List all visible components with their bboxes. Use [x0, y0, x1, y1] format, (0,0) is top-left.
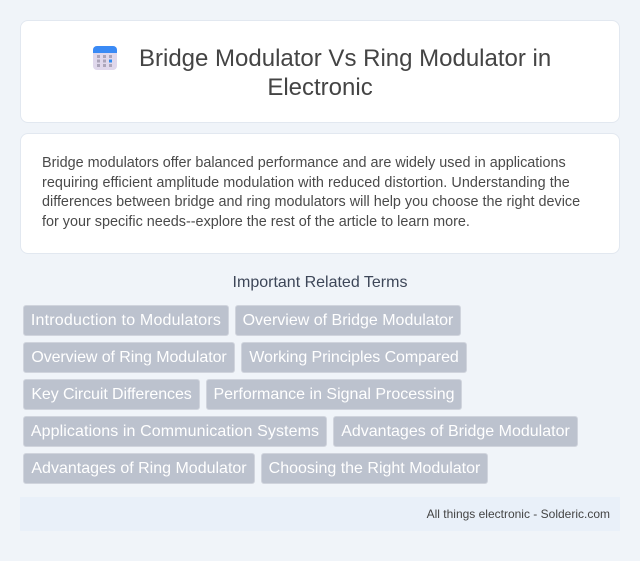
tag — [206, 379, 462, 410]
tag: Overview of Bridge Modulator — [243, 312, 453, 329]
footer bar — [20, 497, 620, 531]
tag: Introduction to Modulators — [31, 312, 221, 329]
description text — [42, 155, 580, 230]
icon: calendar — [93, 46, 117, 70]
tag — [241, 342, 467, 373]
description text: for your specific needs--explore the rest of the article to learn more. — [42, 214, 470, 230]
description panel — [20, 133, 620, 254]
description text: Bridge modulators offer balanced performance and are widely used in applications — [42, 155, 566, 171]
tag: Applications in Communication Systems — [31, 423, 319, 440]
tag — [23, 416, 327, 447]
tag — [23, 453, 255, 484]
tag: Advantages of Bridge Modulator — [341, 423, 570, 440]
description text: differences between bridge and ring modulators will help you choose the right device — [42, 194, 580, 210]
tag: Overview of Ring Modulator — [31, 349, 227, 366]
header panel — [20, 20, 620, 123]
title line 2: Electronic — [267, 74, 373, 101]
footer text: All things electronic - Solderic.com — [427, 507, 610, 521]
description text: requiring efficient amplitude modulation with reduced distortion. Understanding the — [42, 175, 570, 191]
tag — [23, 342, 235, 373]
tag: Working Principles Compared — [249, 349, 459, 366]
tag — [333, 416, 578, 447]
tag: Choosing the Right Modulator — [269, 460, 480, 477]
tag — [23, 305, 229, 336]
tags list — [23, 305, 578, 484]
tag — [261, 453, 488, 484]
title line 1: Bridge Modulator Vs Ring Modulator in — [139, 45, 551, 72]
tag — [235, 305, 461, 336]
heading: important related terms: Important Related Terms — [233, 274, 407, 291]
tag: Key Circuit Differences — [31, 386, 192, 403]
tag: Performance in Signal Processing — [213, 386, 454, 403]
tag — [23, 379, 200, 410]
tag: Advantages of Ring Modulator — [31, 460, 247, 477]
